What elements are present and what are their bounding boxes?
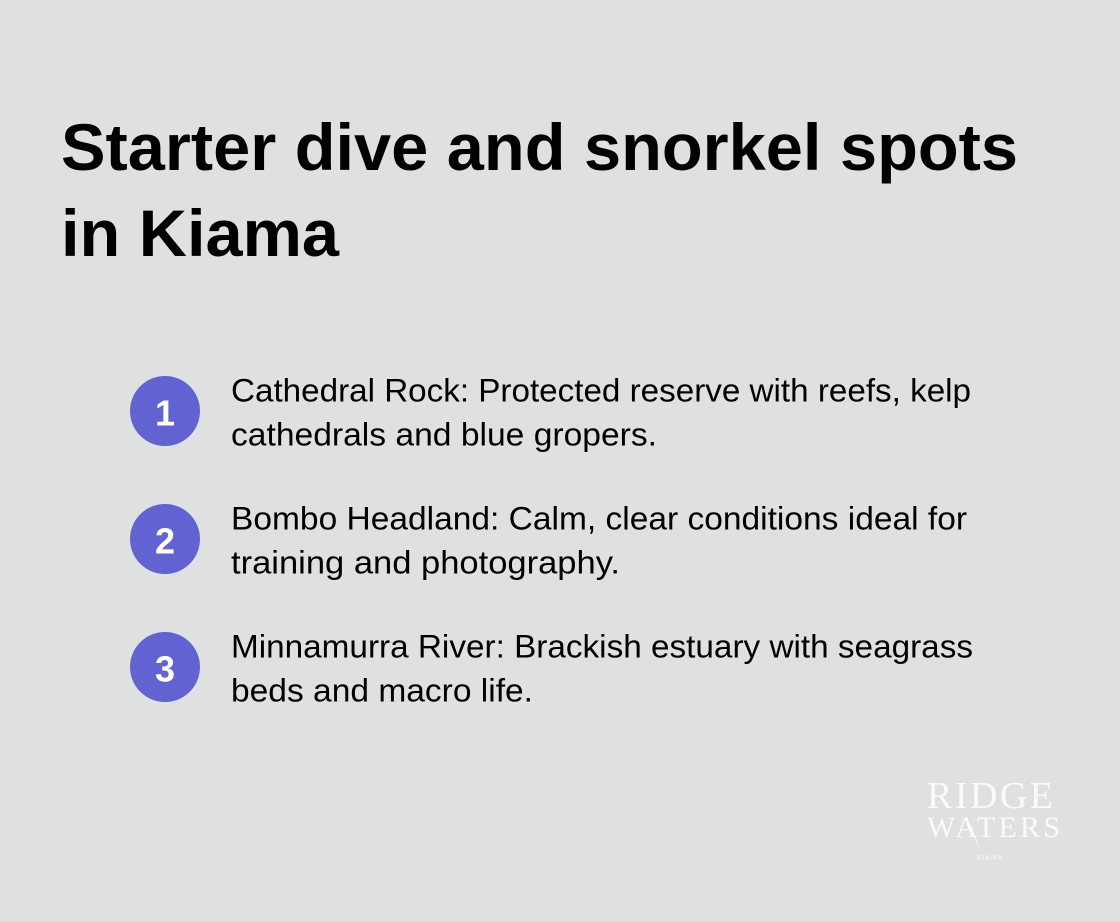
item 1 text: cathedrals and blue gropers. [231,416,657,452]
item 3 text: Minnamurra River: Brackish estuary with seagrass [231,628,973,664]
list item 3 [130,628,973,708]
logo: Ridge Waters Kiama: RIDGE [927,775,1053,817]
title [61,110,1018,270]
logo: Ridge Waters Kiama [927,775,1060,862]
number badge 2 [130,504,200,574]
number badge 1: 1 [155,392,175,434]
number badge 3: 3 [155,648,175,690]
list item 1 [130,372,971,452]
item 1 text [231,372,971,452]
number badge 1 [130,376,200,446]
item 3 text [231,628,973,708]
item 2 text: Bombo Headland: Calm, clear conditions ideal for [231,500,967,536]
item 3 text: beds and macro life. [231,672,533,708]
list item 2 [130,500,967,580]
number badge 2: 2 [155,520,175,562]
item 2 text [231,500,967,580]
logo: Ridge Waters Kiama: WATERS [927,811,1060,844]
title: in Kiama [61,196,340,270]
number badge 3 [130,632,200,702]
logo: Ridge Waters Kiama: KIAMA [977,854,1003,862]
item 1 text: Cathedral Rock: Protected reserve with reefs, kelp [231,372,971,408]
item 2 text: training and photography. [231,544,620,580]
title: Starter dive and snorkel spots [61,110,1018,184]
